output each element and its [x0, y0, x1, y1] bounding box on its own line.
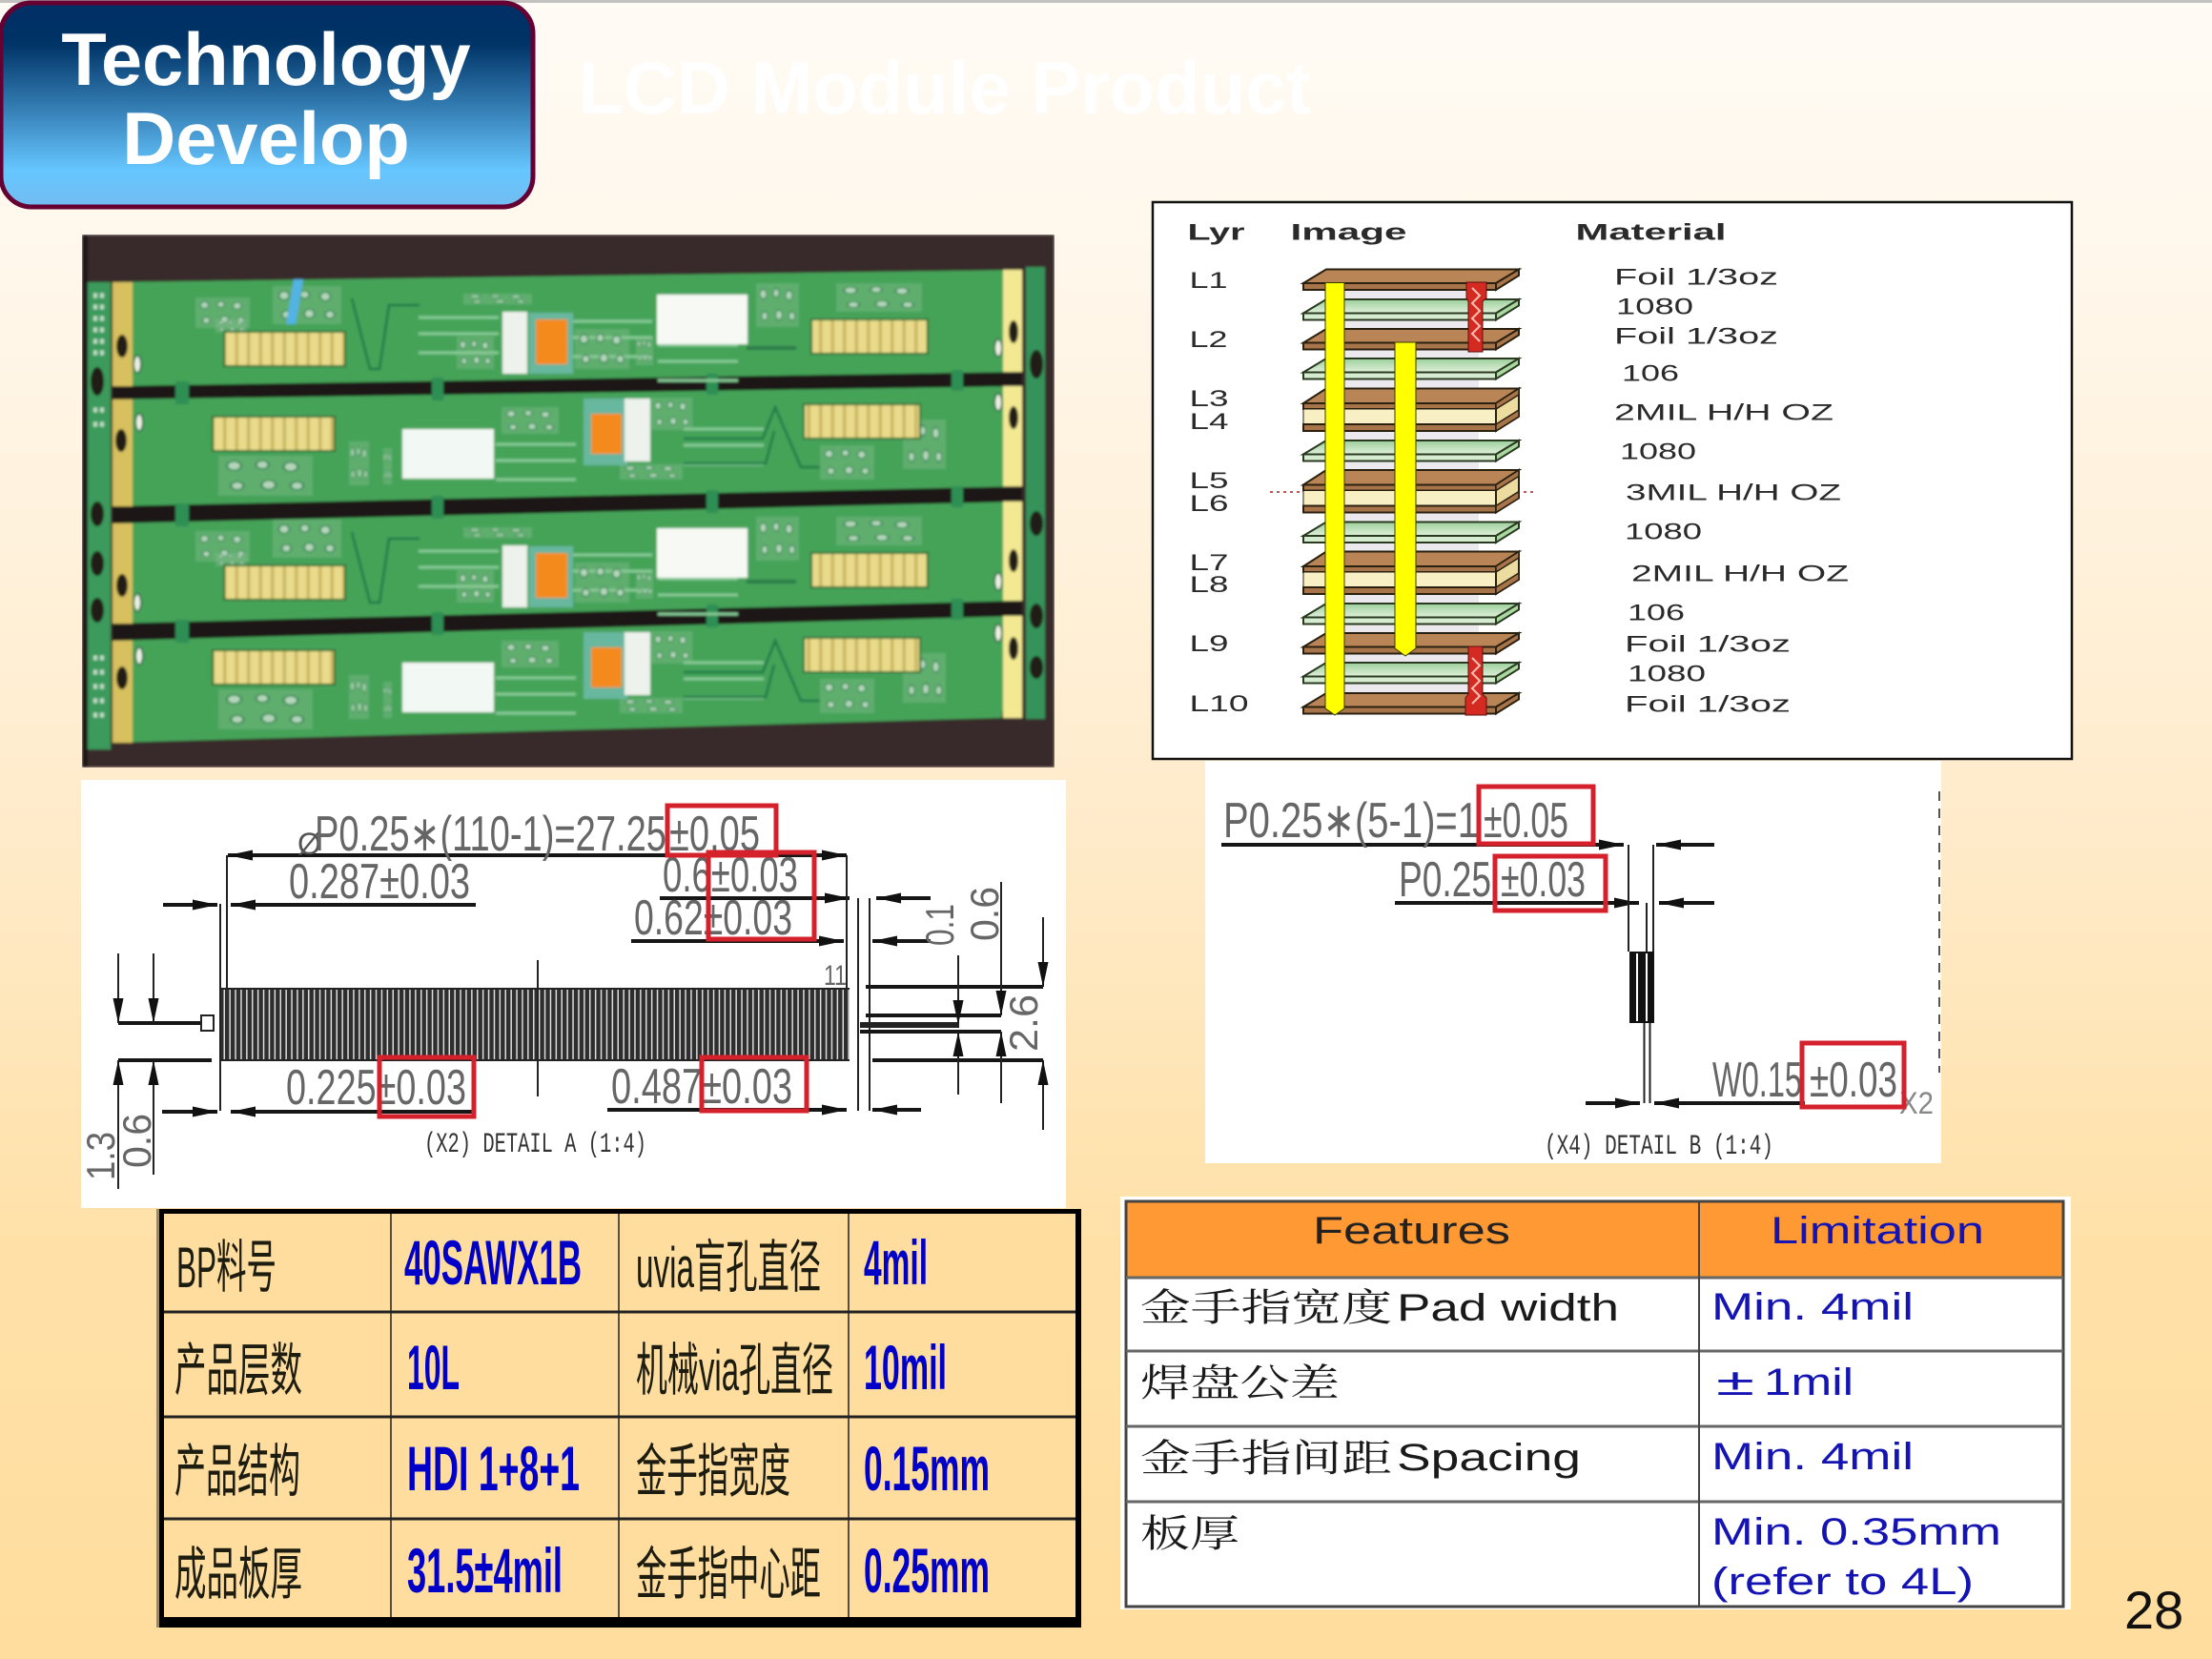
table header: Features — [1313, 1210, 1510, 1252]
row 3: 0.15mm — [864, 1433, 990, 1504]
pad tolerance row: ± — [1716, 1362, 1754, 1403]
layer labels L1 to L10: L9 — [1190, 631, 1228, 657]
layer labels L1 to L10: L4 — [1190, 409, 1228, 435]
layer labels L1 to L10: L1 — [1190, 268, 1228, 294]
detail B text: (X4) DETAIL B (1:4) — [1545, 1131, 1773, 1163]
board 3 components — [195, 517, 928, 614]
board 2 components — [213, 398, 946, 496]
table header: Limitation — [1771, 1210, 1984, 1252]
pad width row: Pad width — [1397, 1287, 1619, 1329]
row 1: 4mil — [864, 1227, 928, 1298]
dimension text: Ø — [297, 827, 321, 861]
spacing row: 金手指间距 — [1140, 1437, 1392, 1480]
detail B text: ±0.03 — [1501, 852, 1586, 908]
table: board specification — [156, 1209, 1081, 1628]
stack-up column headers — [1188, 219, 1726, 246]
row 3 — [174, 1433, 990, 1504]
table: features and limitations — [1120, 1197, 2071, 1609]
row 3: HDI 1+8+1 — [407, 1433, 580, 1504]
detail B text: W0.15 — [1712, 1053, 1802, 1108]
row 2: 10mil — [864, 1332, 947, 1403]
detail B text: ±0.03 — [1810, 1053, 1897, 1108]
dimension lines and arrows — [118, 855, 1043, 1189]
dimension text: 0.287±0.03 — [289, 854, 470, 910]
dimension text: 0.62±0.03 — [634, 891, 792, 946]
page number: 28 — [2124, 1580, 2183, 1640]
dimension text: 0.6±0.03 — [663, 848, 798, 903]
material column: Foil 1/3oz — [1614, 265, 1778, 290]
board thickness row: Min. 0.35mm — [1711, 1511, 2001, 1553]
row 2 — [174, 1332, 947, 1403]
board 1 components — [195, 279, 928, 380]
detail B text — [1223, 793, 1934, 1163]
layer labels L1 to L10: L6 — [1190, 491, 1228, 517]
row 1 — [176, 1227, 928, 1300]
finger comb — [221, 989, 850, 1060]
top edge line — [0, 0, 2212, 3]
pad tolerance row: 1mil — [1764, 1362, 1854, 1403]
row 4: 31.5±4mil — [407, 1535, 563, 1606]
row 1: BP料号 — [176, 1236, 276, 1300]
material column: Foil 1/3oz — [1614, 324, 1778, 349]
detail B text: P0.25∗(5-1)=1 — [1223, 793, 1479, 849]
row 3: 产品结构 — [174, 1440, 300, 1504]
dimension text: 0.1 — [917, 904, 962, 946]
material column: 1080 — [1620, 439, 1696, 465]
red tolerance highlight boxes — [1479, 787, 1904, 1107]
board 4 components — [213, 631, 946, 729]
spacing row: Min. 4mil — [1711, 1436, 1914, 1478]
stack-up column headers: Image — [1291, 219, 1407, 246]
row 4: 成品板厚 — [174, 1543, 302, 1607]
dimension text: 0.6 — [114, 1114, 159, 1168]
dimension text: 2.6 — [1001, 994, 1046, 1052]
board thickness row: (refer to 4L) — [1711, 1561, 1974, 1603]
material column: 106 — [1622, 360, 1679, 387]
layer labels L1 to L10: L10 — [1190, 691, 1249, 717]
dimension text: 0.487±0.03 — [611, 1059, 792, 1115]
row 4: 0.25mm — [864, 1535, 990, 1606]
table header — [1313, 1210, 1984, 1252]
board thickness row: 板厚 — [1140, 1512, 1239, 1555]
header badge: Technology Develop: Develop — [122, 98, 410, 180]
pad tolerance row — [1140, 1362, 1854, 1404]
layer labels L1 to L10: L2 — [1190, 327, 1228, 353]
material column: 3MIL H/H OZ — [1626, 481, 1841, 505]
pad width row: Min. 4mil — [1711, 1286, 1914, 1328]
layer labels L1 to L10: L3 — [1190, 386, 1228, 412]
detail B text: P0.25 — [1399, 852, 1491, 908]
header badge: Technology Develop — [1, 3, 533, 207]
red tolerance highlight boxes — [379, 806, 814, 1116]
dimension text: ±0.05 — [669, 807, 760, 862]
dimension text: 0.6 — [962, 887, 1007, 941]
dimension text: P0.25∗(110-1)=27.25 — [315, 807, 666, 862]
material column: 1080 — [1616, 294, 1693, 320]
layer labels L1 to L10: L5 — [1190, 468, 1228, 494]
stack-up column headers: Material — [1575, 219, 1726, 246]
spacing row — [1140, 1436, 1914, 1480]
header badge: Technology Develop: Technology — [61, 19, 471, 101]
dimension text: 1.3 — [78, 1132, 123, 1180]
pad width row: 金手指宽度 — [1140, 1286, 1392, 1329]
layer labels L1 to L10 — [1190, 268, 1249, 717]
material column: 1080 — [1628, 662, 1706, 686]
ghost title: LCD Module Product: LCD Module Product — [578, 48, 1311, 130]
material column: 106 — [1628, 601, 1685, 625]
material column: 2MIL H/H OZ — [1631, 561, 1849, 587]
material column: Foil 1/3oz — [1625, 631, 1791, 658]
row 1: 40SAWX1B — [404, 1227, 582, 1298]
row 2: 产品层数 — [174, 1339, 302, 1403]
spacing row: Spacing — [1397, 1437, 1581, 1479]
material column — [1614, 265, 1849, 717]
row 4 — [174, 1535, 990, 1607]
row 3: 金手指宽度 — [636, 1440, 790, 1504]
row 4: 金手指中心距 — [636, 1543, 821, 1607]
dimension text: 0.225±0.03 — [286, 1060, 466, 1116]
board thickness row — [1140, 1511, 2001, 1603]
panel: detail A drawing — [78, 780, 1066, 1208]
layer labels L1 to L10: L7 — [1190, 550, 1228, 576]
material column: 2MIL H/H OZ — [1614, 400, 1833, 425]
stack-up image — [1270, 269, 1537, 715]
material column: Foil 1/3oz — [1625, 692, 1791, 717]
pad tolerance row: 焊盘公差 — [1140, 1362, 1340, 1404]
layer labels L1 to L10: L8 — [1190, 572, 1228, 598]
row 2: 10L — [407, 1332, 460, 1403]
panel: detail B drawing — [1205, 761, 1941, 1163]
detail B text: X2 — [1899, 1086, 1934, 1120]
pad width row — [1140, 1286, 1914, 1329]
detail B dimension lines — [1221, 791, 1939, 1103]
dimension text — [78, 807, 1046, 1180]
photo: PCB panel with four boards — [82, 235, 1055, 768]
stack-up column headers: Lyr — [1188, 219, 1245, 246]
detail B text: ±0.05 — [1484, 793, 1568, 849]
row 1: uvia盲孔直径 — [636, 1236, 821, 1300]
dimension text: (X2) DETAIL A (1:4) — [424, 1129, 646, 1161]
row 2: 机械via孔直径 — [636, 1339, 833, 1403]
material column: 1080 — [1625, 519, 1702, 545]
dimension text: 11 — [824, 960, 847, 992]
panel: layer stack-up diagram — [1153, 202, 2072, 759]
